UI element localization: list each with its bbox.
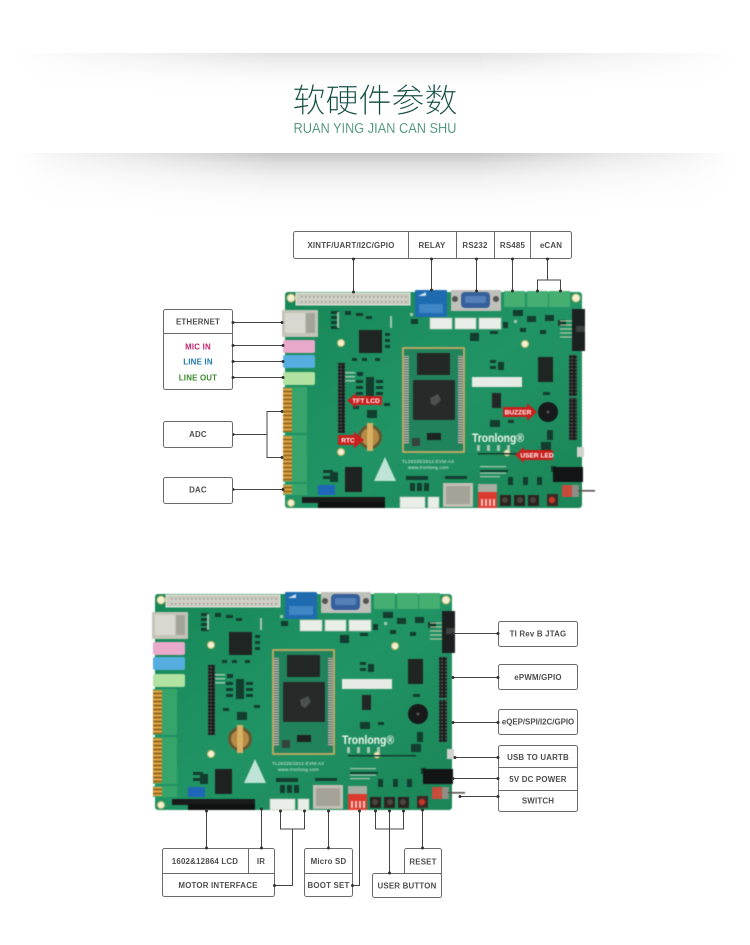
TFT header [338, 363, 345, 433]
coin cell [358, 423, 382, 451]
top connector label bar: RS485 [500, 241, 525, 250]
power jack [553, 467, 583, 482]
analog terminal blocks [283, 387, 307, 495]
JTAG header [560, 309, 585, 351]
ethernet and audio label box [164, 310, 232, 390]
callout: buzzer: BUZZER [505, 410, 532, 416]
DAC label [164, 478, 232, 504]
GPIO headers [569, 355, 577, 440]
LCD IR motor label stack: IR [257, 857, 265, 866]
bottom board brand: Tronlong® [342, 733, 394, 747]
top connector label bar: XINTF/UART/I2C/GPIO [307, 241, 395, 250]
reset label [404, 848, 442, 874]
RS232 connector [451, 290, 501, 311]
top board photo [282, 290, 595, 508]
callout: user LED: USER LED [520, 452, 554, 460]
LCD IR motor label stack: MOTOR INTERFACE [178, 881, 258, 890]
USB power switch label stack [498, 746, 578, 812]
power switch [562, 485, 595, 497]
top connector label bar: RELAY [418, 241, 446, 250]
user button label [372, 874, 442, 898]
reset label: RESET [409, 858, 437, 866]
LCD IR motor label stack: 1602&12864 LCD [172, 857, 238, 866]
core module [402, 347, 465, 453]
ethernet and audio label box: ETHERNET [176, 318, 220, 326]
user button label: USER BUTTON [377, 882, 437, 890]
board brand: Tronlong® [472, 431, 524, 445]
ethernet and audio label box: LINE IN [183, 358, 213, 366]
top connector leader lines [354, 259, 560, 292]
board silk url: www.tronlong.com [408, 465, 449, 470]
bottom board art [152, 592, 465, 810]
header shadow band [48, 53, 703, 190]
right IC 2 [492, 393, 501, 408]
bottom board silk text: TL28335/2812-EVM-A3 [272, 761, 324, 766]
LCD IR motor label stack [162, 848, 274, 896]
bottom white connectors [400, 497, 439, 508]
ESD triangle [374, 457, 396, 481]
USB power switch label stack: USB TO UARTB [507, 753, 569, 762]
PCB base [285, 292, 582, 508]
bottom board silk url: www.tronlong.com [278, 767, 319, 772]
title: 软硬件参数 [292, 74, 458, 122]
USB power switch label stack: 5V DC POWER [509, 775, 567, 784]
callout: TFT LCD [347, 393, 382, 408]
right leader lines [453, 634, 498, 796]
white connectors [430, 318, 501, 329]
ethernet and audio label box: LINE OUT [179, 374, 217, 382]
ePWM label: ePWM/GPIO [514, 673, 562, 682]
board texture components [323, 310, 566, 491]
callout: user LED [515, 447, 554, 463]
blue potentiometer [318, 485, 335, 495]
green terminal blocks [504, 291, 570, 307]
buzzer [538, 402, 558, 422]
mounting holes [287, 294, 580, 506]
Micro SD and boot set label stack: BOOT SET [308, 881, 349, 890]
ethernet jack [282, 310, 318, 337]
top connector label bar: eCAN [540, 241, 562, 250]
DIP switch [478, 484, 497, 508]
JTAG label [498, 622, 578, 646]
USB port [577, 447, 584, 457]
LCD header bottom [302, 497, 385, 508]
subtitle: RUAN YING JIAN CAN SHU [294, 121, 456, 137]
Micro SD and boot set label stack [304, 848, 352, 896]
audio jacks [283, 340, 315, 385]
relay [415, 290, 447, 317]
board silk text: TL28335/2812-EVM-A3 [402, 459, 454, 464]
JTAG label: TI Rev B JTAG [510, 630, 566, 638]
Micro SD and boot set label stack: Micro SD [311, 857, 346, 866]
top IDC connector [296, 293, 410, 305]
USB power switch label stack: SWITCH [522, 796, 554, 806]
CPU side chip [359, 330, 382, 353]
top connector label bar: RS232 [462, 241, 488, 250]
DAC label: DAC [189, 486, 207, 494]
bottom leader lines [206, 809, 422, 886]
callout: RTC: RTC [341, 438, 355, 444]
reset button [547, 494, 558, 506]
logic IC [345, 467, 362, 492]
ADC label: ADC [189, 430, 207, 439]
callout: buzzer [503, 403, 537, 421]
eQEP label: eQEP/SPI/I2C/GPIO [502, 718, 574, 726]
ethernet and audio label box: MIC IN [185, 342, 211, 352]
left leader lines [233, 322, 283, 490]
white silk block [472, 377, 522, 387]
top connector label bar [294, 232, 572, 258]
bottom board photo [152, 592, 465, 810]
Micro SD slot [443, 483, 473, 507]
callout: RTC [338, 432, 364, 448]
eQEP label [498, 710, 578, 734]
right IC [538, 357, 553, 382]
user buttons [500, 495, 539, 506]
ePWM label [498, 664, 578, 690]
ADC label [164, 422, 232, 448]
callout: TFT LCD: TFT LCD [352, 398, 380, 405]
